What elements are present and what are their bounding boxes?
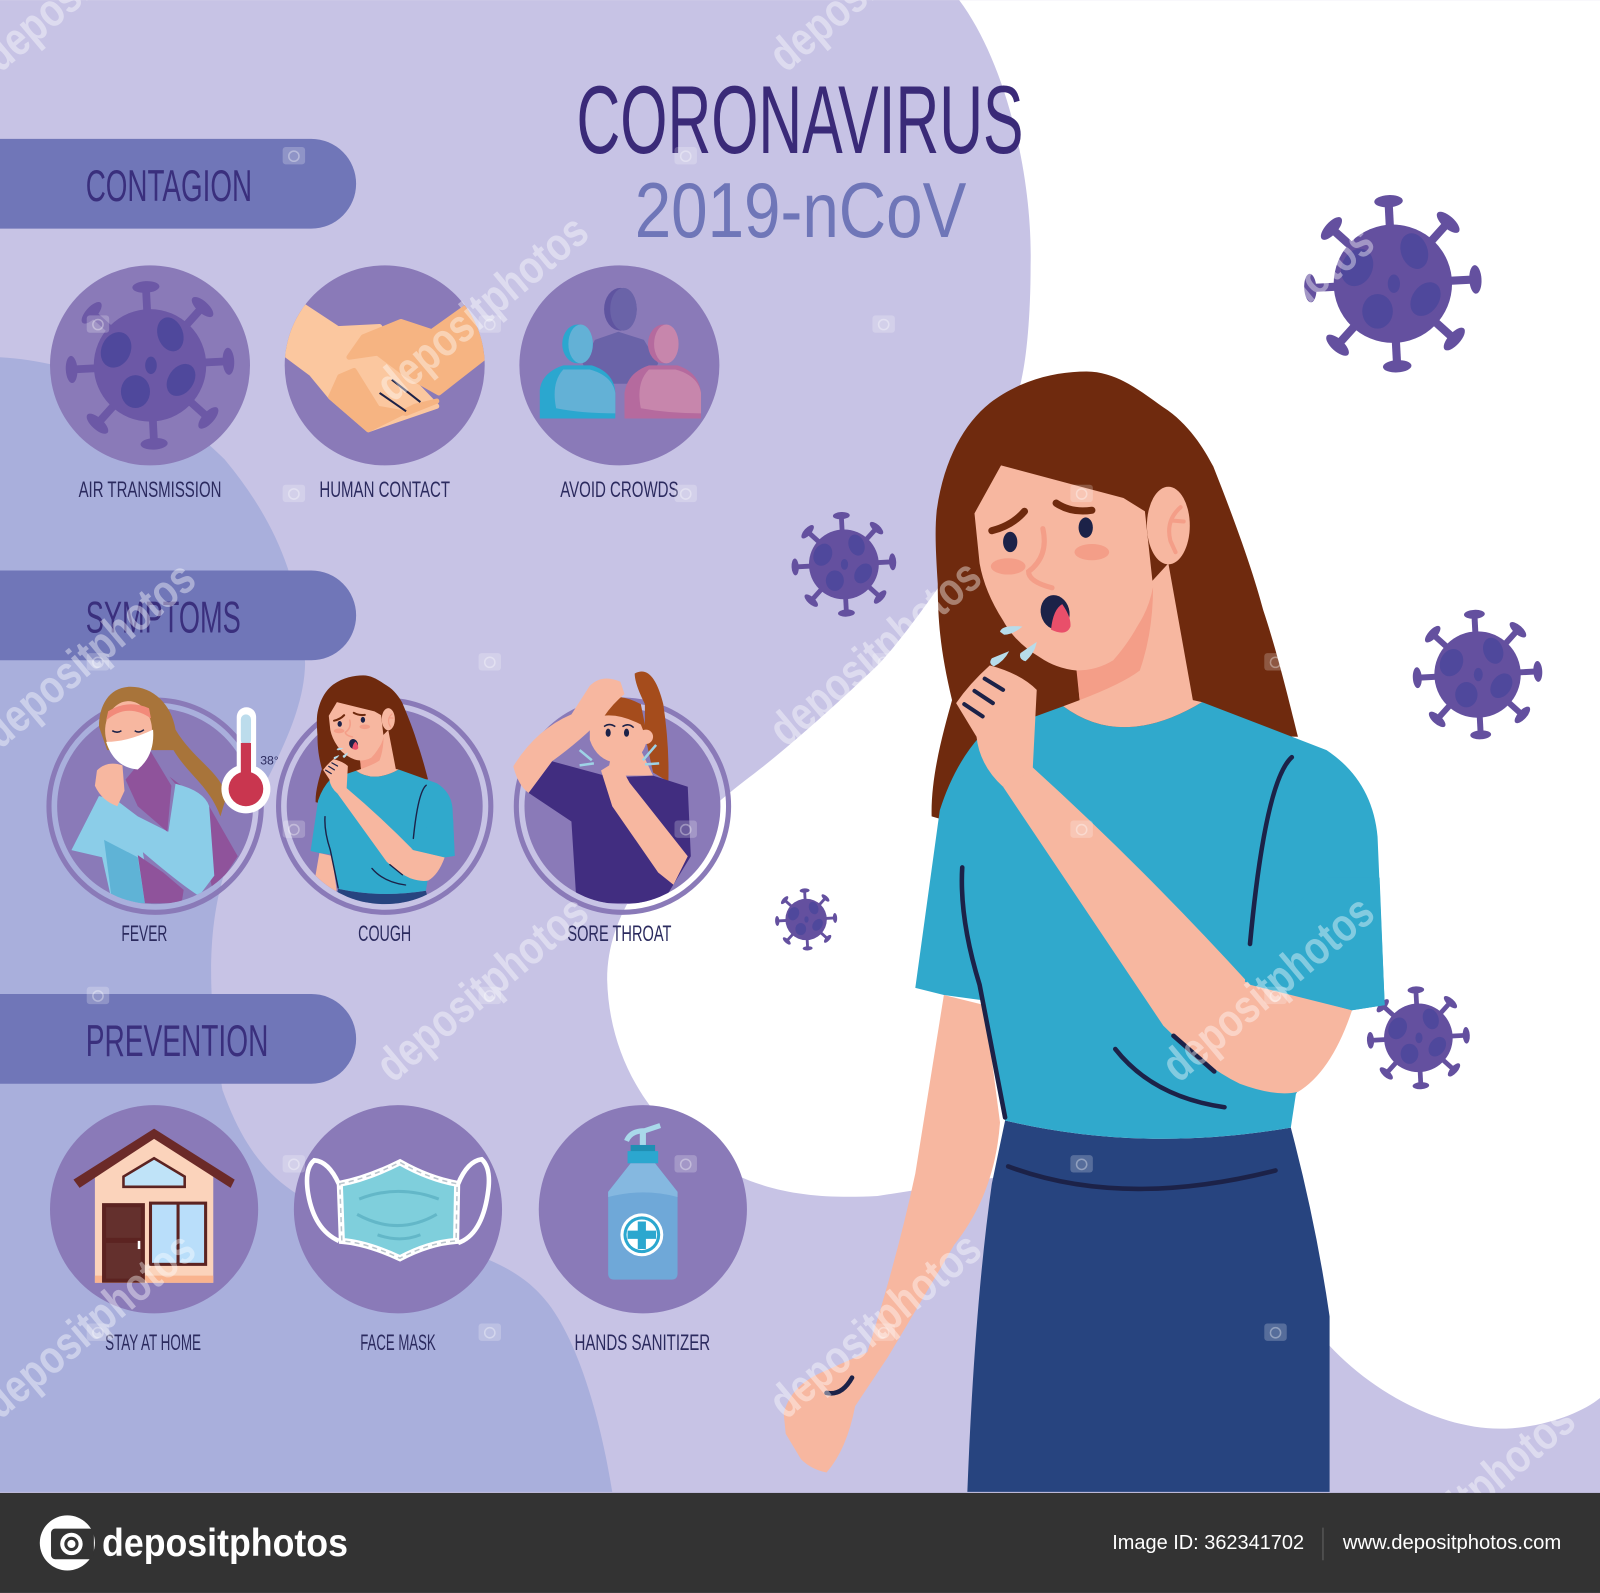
label: air transmission: AIR TRANSMISSION [79,477,221,502]
label: stay at home: STAY AT HOME [105,1330,201,1355]
panel: symptoms [0,570,732,941]
icon: cough woman [276,675,494,915]
heading: contagion [0,139,356,229]
icon: avoid crowds [519,265,719,465]
label: sore throat: SORE THROAT [567,921,672,946]
label: 38 degrees: 38° [260,753,279,767]
icon: face mask [294,1105,502,1313]
label: face mask: FACE MASK [360,1330,436,1355]
title: CORONAVIRUS [577,65,1023,174]
icon: sore throat woman [513,672,729,912]
icon: camera logo [40,1515,95,1570]
icon: thermometer [221,707,270,813]
panel: prevention [0,994,747,1355]
heading: symptoms [0,570,356,660]
website: www.depositphotos.com [1342,1532,1561,1554]
icon: hand sanitizer bottle [539,1105,747,1313]
icon: fever woman [49,687,279,912]
icon: house [50,1105,258,1313]
title [577,65,1023,254]
watermark: depositphotos [366,204,598,411]
label: hands sanitizer: HANDS SANITIZER [574,1330,710,1355]
icon: floating virus lower right [1367,986,1470,1090]
label: human contact: HUMAN CONTACT [319,477,450,502]
icon: air transmission virus [50,265,250,465]
icon: floating virus large [1303,194,1482,373]
main illustration: coughing woman [784,372,1385,1492]
heading: symptoms: SYMPTOMS [86,592,241,643]
icon: floating virus small [775,888,837,951]
watermark: depositphotos [759,1222,991,1428]
title: 2019-nCoV [635,168,967,254]
watermark: depositphotos [759,549,991,756]
icon: floating virus right [1412,609,1543,740]
heading: contagion: CONTAGION [86,160,252,211]
label: avoid crowds: AVOID CROWDS [560,477,679,502]
watermark: depositphotos [1152,885,1384,1091]
label: fever: FEVER [121,921,167,946]
watermark: depositphotos [1152,215,1384,421]
logo text: depositphotos [102,1522,348,1565]
heading: prevention [0,994,356,1084]
footer bar [0,1493,1600,1593]
label: cough: COUGH [358,921,411,946]
icon: floating virus left [791,512,897,617]
heading: prevention: PREVENTION [86,1015,268,1066]
panel: contagion [0,139,719,502]
watermark: depositphotos [366,885,598,1091]
icon: handshake [276,265,490,465]
image id: Image ID: 362341702 [1112,1532,1304,1554]
